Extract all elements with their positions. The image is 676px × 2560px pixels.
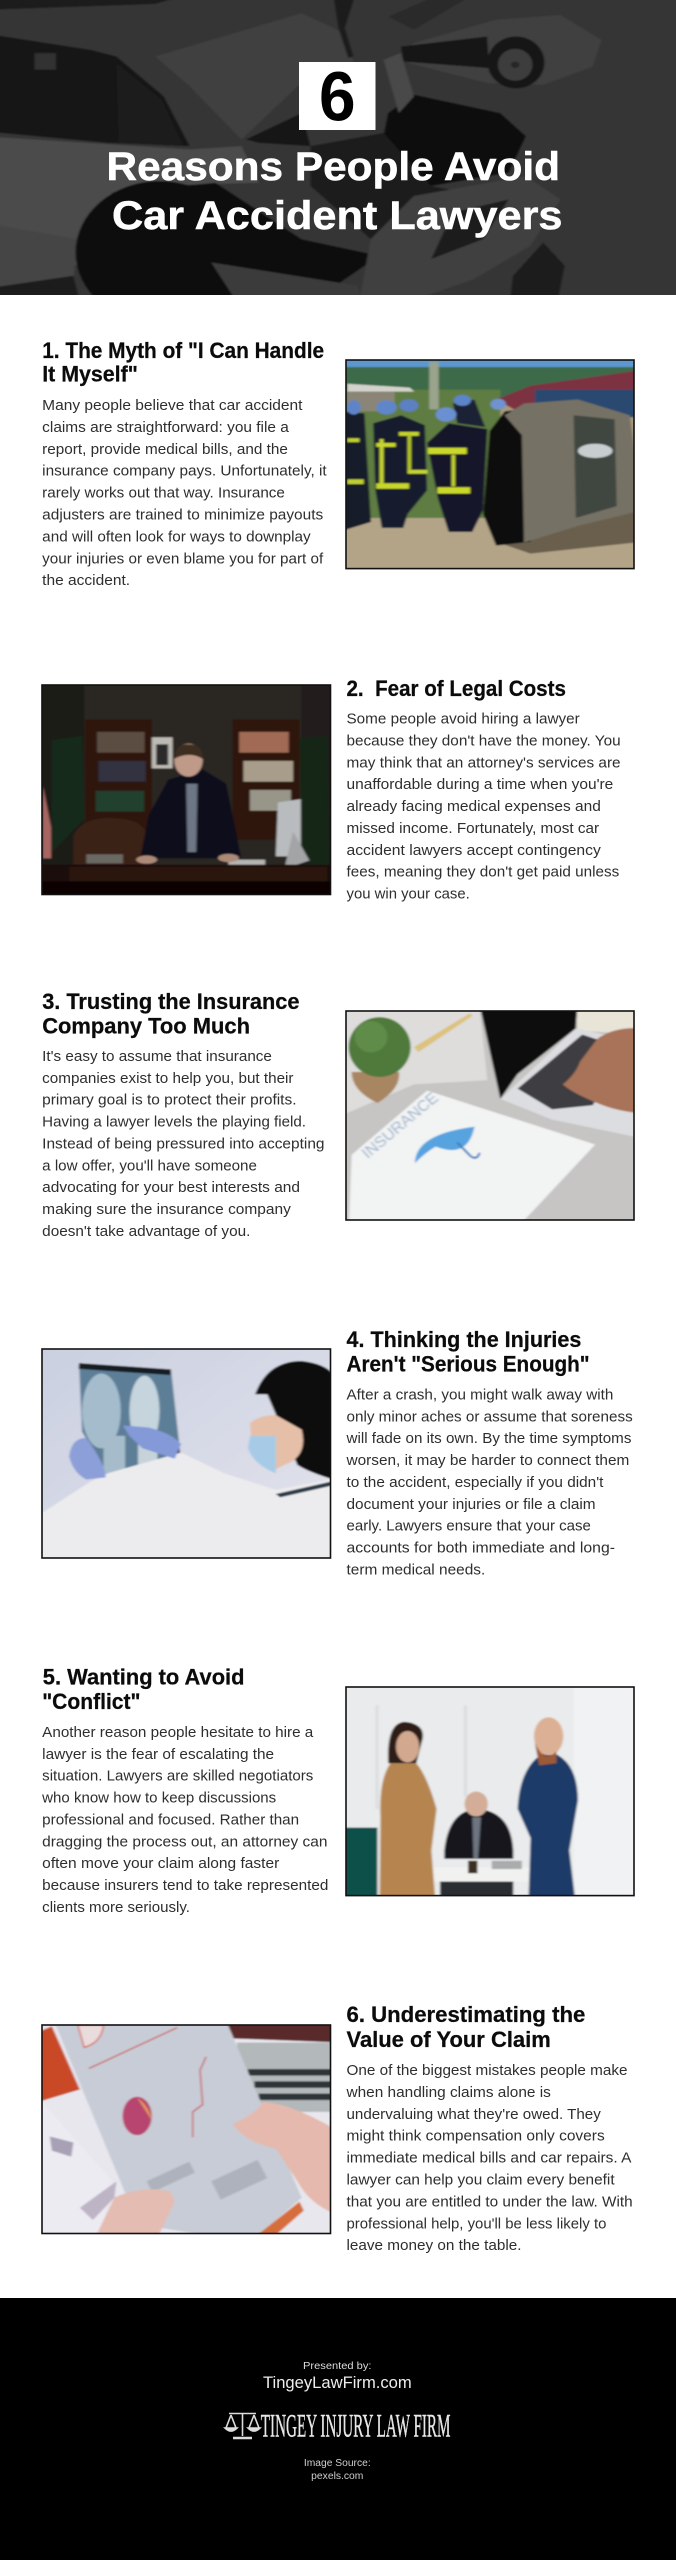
body text 6: that you are entitled to under the law. With: [346, 2194, 633, 2210]
body text 5: [41, 1725, 328, 1916]
heading 6: 6. Underestimating the: [346, 2002, 585, 2027]
body text 3: Having a lawyer levels the playing field.: [42, 1115, 306, 1131]
panel: reason 1: [42, 338, 643, 589]
body text 2: Some people avoid hiring a lawyer: [346, 712, 580, 728]
website: TingeyLawFirm.com: [263, 2374, 412, 2392]
body text 5: lawyer is the fear of escalating the: [42, 1747, 274, 1763]
body text 1: insurance company pays. Unfortunately, it: [42, 464, 327, 480]
body text 5: often move your claim along faster: [42, 1856, 279, 1872]
body text 3: companies exist to help you, but their: [42, 1071, 294, 1087]
photo: insurance paper and laptop: INSURANCE: [358, 1089, 442, 1162]
body text 4: will fade on its own. By the time symptoms: [345, 1431, 631, 1447]
body text 3: primary goal is to protect their profits.: [42, 1093, 297, 1109]
logo: Tingey Injury Law Firm: [225, 2408, 450, 2444]
presented by text: Presented by:: [303, 2360, 372, 2372]
number badge: 6: [319, 58, 356, 136]
heading 5: [42, 1665, 245, 1714]
body text 5: who know how to keep discussions: [41, 1791, 276, 1807]
body text 1: claims are straightforward: you file a: [42, 420, 290, 436]
icon: scales of justice: [225, 2414, 260, 2438]
body text 1: the accident.: [42, 573, 130, 589]
heading 3: Company Too Much: [42, 1013, 250, 1038]
body text 1: [42, 398, 327, 589]
body text 6: One of the biggest mistakes people make: [346, 2063, 628, 2079]
heading 4: 4. Thinking the Injuries: [346, 1327, 581, 1352]
body text 1: adjusters are trained to minimize payouts: [42, 508, 323, 524]
heading 5: 5. Wanting to Avoid: [43, 1665, 244, 1690]
title: [106, 145, 562, 238]
body text 6: professional help, you'll be less likely to: [346, 2216, 606, 2232]
heading 3: 3. Trusting the Insurance: [42, 989, 299, 1014]
body text 5: because insurers tend to take represented: [42, 1878, 328, 1894]
image source credit: pexels.com: [311, 2471, 363, 2482]
body text 2: may think that an attorney's services are: [346, 755, 621, 771]
number badge: [299, 58, 376, 136]
body text 5: situation. Lawyers are skilled negotiators: [42, 1769, 313, 1785]
body text 2: unaffordable during a time when you're: [346, 777, 613, 793]
body text 1: rarely works out that way. Insurance: [42, 486, 285, 502]
body text 2: [346, 712, 621, 903]
body text 3: Instead of being pressured into accepting: [42, 1136, 324, 1152]
image source credit: Image Source:: [304, 2458, 371, 2469]
body text 6: when handling claims alone is: [345, 2085, 551, 2101]
heading 2: 2. Fear of Legal Costs: [346, 676, 566, 701]
panel: reason 5: [41, 1665, 643, 1916]
heading 1: It Myself": [42, 362, 138, 387]
body text 1: and will often look for ways to downplay: [42, 529, 311, 545]
panel: reason 6: [33, 2002, 633, 2254]
body text 3: [42, 1049, 324, 1240]
heading 1: [42, 338, 324, 387]
body text 4: only minor aches or assume that soreness: [346, 1409, 633, 1425]
body text 1: your injuries or even blame you for part of: [42, 551, 324, 567]
photo: hands holding chart report: [42, 2026, 330, 2233]
body text 6: [345, 2063, 633, 2254]
body text 3: doesn't take advantage of you.: [42, 1224, 250, 1240]
body text 2: you win your case.: [346, 887, 470, 903]
body text 5: clients more seriously.: [42, 1900, 190, 1916]
panel: reason 3: [42, 989, 643, 1240]
photo: doctor examining x-ray: [42, 1350, 330, 1557]
body text 1: report, provide medical bills, and the: [42, 442, 288, 458]
image source credit: [304, 2458, 371, 2482]
title: Reasons People Avoid: [106, 145, 560, 189]
body text 1: Many people believe that car accident: [42, 398, 302, 414]
photo: firefighters at overturned car: [346, 360, 634, 568]
body text 2: because they don't have the money. You: [346, 734, 621, 750]
heading 1: 1. The Myth of "I Can Handle: [42, 338, 324, 363]
body text 3: advocating for your best interests and: [42, 1180, 300, 1196]
body text 5: dragging the process out, an attorney can: [42, 1834, 327, 1850]
heading 6: Value of Your Claim: [346, 2027, 551, 2052]
photo: lawyer at desk: [42, 686, 330, 894]
body text 4: early. Lawyers ensure that your case: [346, 1519, 591, 1535]
panel: reason 2: [33, 676, 621, 904]
photo: insurance paper and laptop: [346, 1012, 634, 1220]
body text 4: worsen, it may be harder to connect them: [345, 1453, 629, 1469]
heading 3: [42, 989, 299, 1038]
header panel: [0, 0, 676, 324]
body text 3: It's easy to assume that insurance: [42, 1049, 272, 1065]
body text 4: After a crash, you might walk away with: [346, 1387, 613, 1403]
footer panel: TINGEY INJURY LAW FIRM: [261, 2408, 450, 2444]
body text 2: missed income. Fortunately, most car: [346, 821, 599, 837]
body text 4: [345, 1387, 633, 1578]
body text 3: a low offer, you'll have someone: [42, 1158, 257, 1174]
body text 2: fees, meaning they don't get paid unless: [346, 865, 619, 881]
body text 6: undervaluing what they're owed. They: [346, 2107, 602, 2123]
body text 2: accident lawyers accept contingency: [346, 843, 602, 859]
header photo: crashed cars: [0, 0, 676, 295]
body text 4: accounts for both immediate and long-: [346, 1540, 615, 1556]
body text 4: term medical needs.: [346, 1562, 485, 1578]
body text 6: might think compensation only covers: [346, 2129, 605, 2145]
footer panel: [0, 2298, 676, 2560]
body text 4: to the accident, especially if you didn't: [346, 1475, 603, 1491]
title: Car Accident Lawyers: [112, 194, 562, 238]
body text 5: professional and focused. Rather than: [42, 1812, 299, 1828]
body text 6: immediate medical bills and car repairs. A: [346, 2151, 632, 2167]
heading 6: [346, 2002, 585, 2052]
body text 2: already facing medical expenses and: [346, 799, 601, 815]
body text 6: leave money on the table.: [346, 2238, 522, 2254]
body text 3: making sure the insurance company: [42, 1202, 292, 1218]
body text 4: document your injuries or file a claim: [346, 1497, 596, 1513]
photo: three people in office: [346, 1688, 633, 1895]
heading 4: [346, 1327, 590, 1377]
body text 6: lawyer can help you claim every benefit: [346, 2172, 615, 2188]
body text 5: Another reason people hesitate to hire a: [42, 1725, 314, 1741]
heading 5: "Conflict": [42, 1689, 141, 1714]
panel: reason 4: [33, 1327, 633, 1578]
heading 4: Aren't "Serious Enough": [346, 1352, 590, 1377]
